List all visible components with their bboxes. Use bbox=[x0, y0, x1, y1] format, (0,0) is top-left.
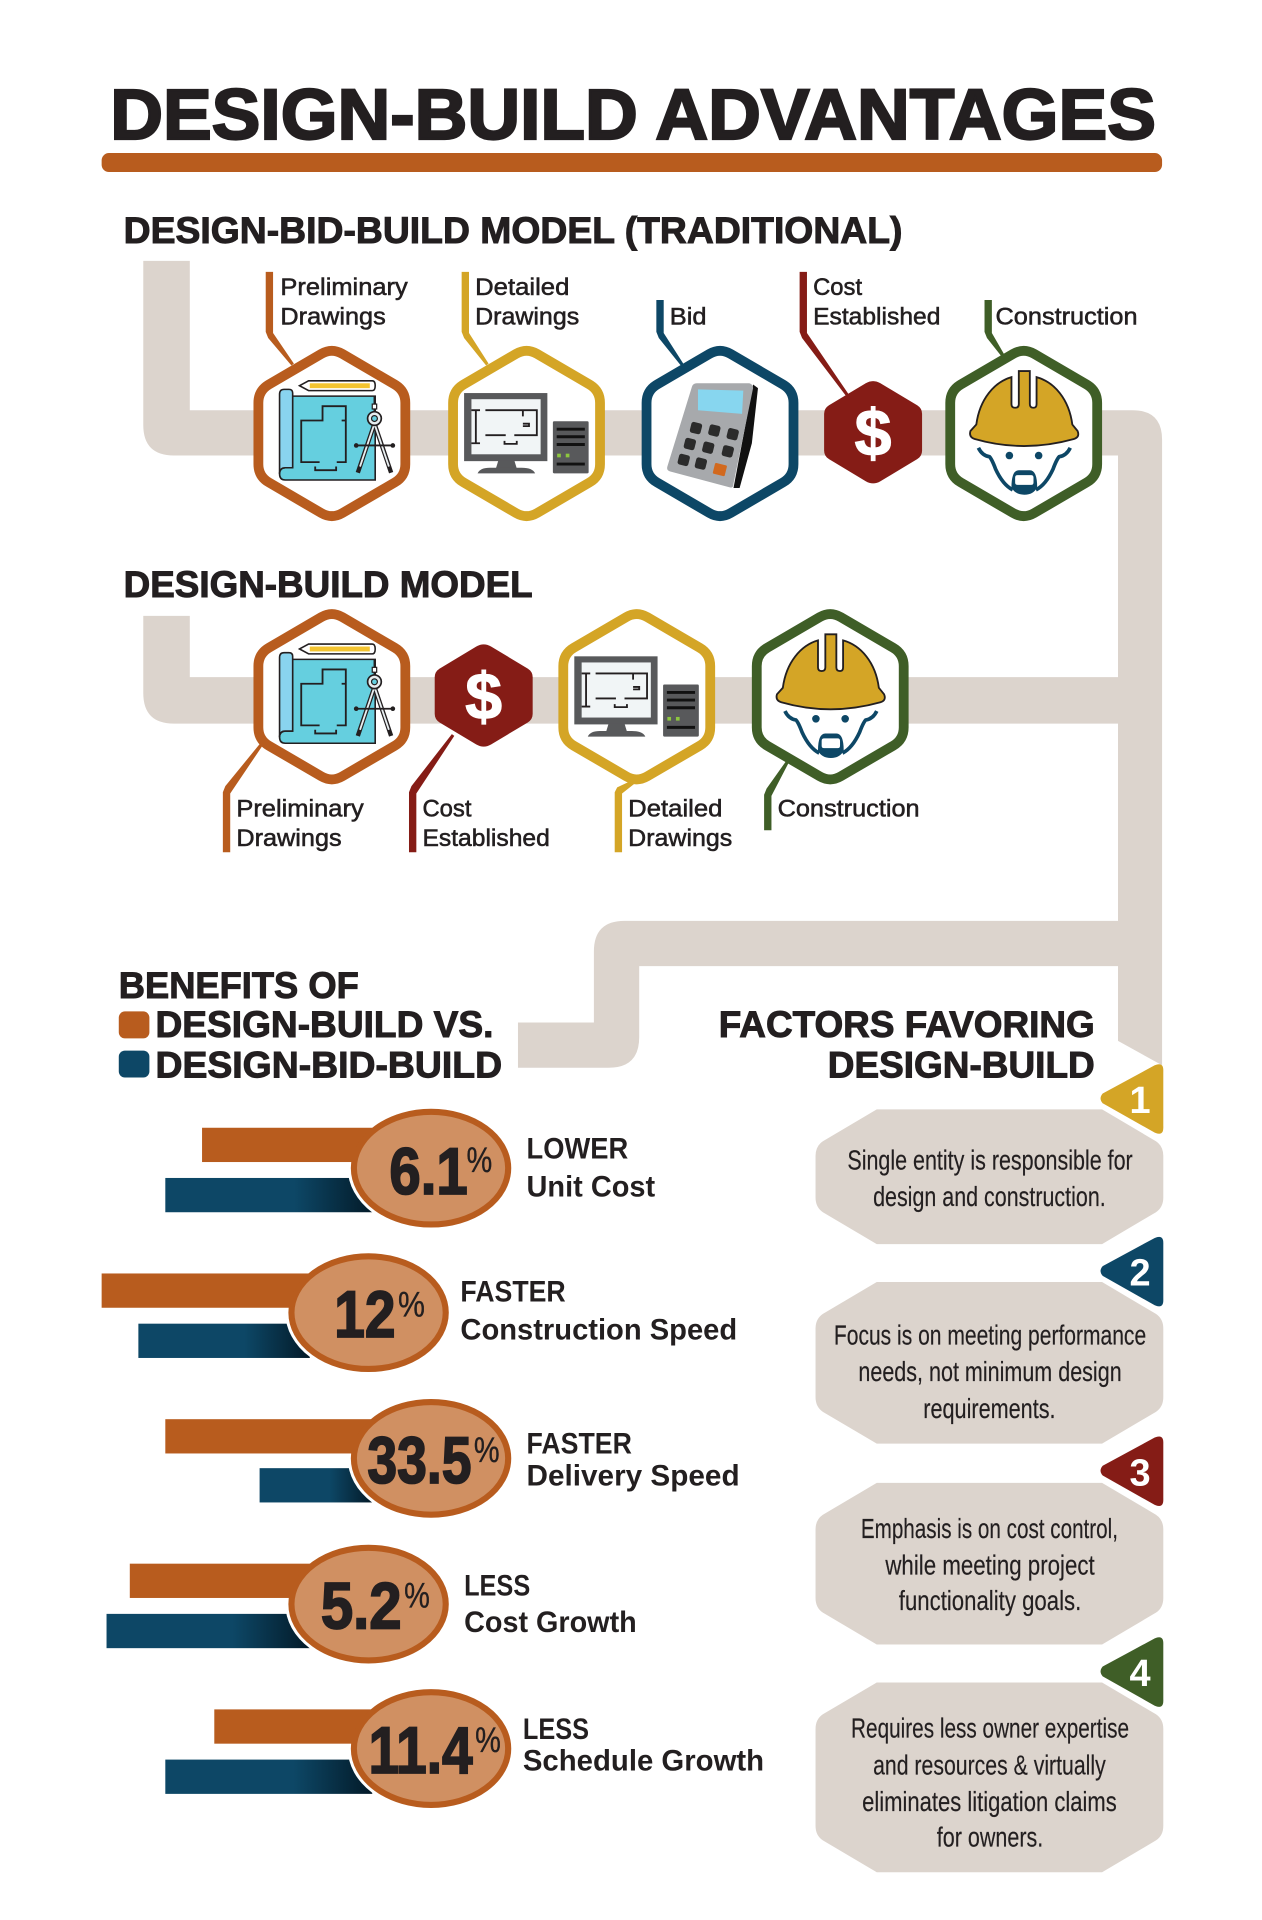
heading and legend: benefits: BENEFITS OF bbox=[119, 965, 359, 1006]
factor 1: 1 bbox=[1129, 1080, 1151, 1122]
factor 1: design and construction. bbox=[873, 1181, 1106, 1212]
step: cost established (traditional) bbox=[800, 272, 940, 483]
flow track: design-bid-build path bbox=[143, 261, 1162, 1065]
step: detailed drawings (traditional) bbox=[453, 272, 600, 516]
benefit: 11.4% less schedule growth: LESS bbox=[523, 1713, 589, 1746]
flow track: design-build path bbox=[143, 616, 1118, 724]
benefit: 12% faster construction speed: 12 bbox=[334, 1278, 396, 1352]
heading and legend: benefits: DESIGN-BID-BUILD bbox=[156, 1045, 502, 1086]
heading: factors favoring design-build bbox=[719, 1004, 1095, 1086]
step: preliminary drawings (design-build): Drawings bbox=[236, 825, 342, 852]
step: cost established (design-build): Established bbox=[422, 825, 550, 852]
step: cost established (traditional): $ bbox=[855, 397, 891, 471]
benefit: 33.5% faster delivery speed: % bbox=[474, 1430, 500, 1470]
step: construction (traditional) bbox=[950, 300, 1138, 516]
factor 3: while meeting project bbox=[885, 1550, 1095, 1581]
flow track: connector to benefits bbox=[518, 921, 1118, 1068]
factor 2: requirements. bbox=[923, 1393, 1056, 1424]
step: cost established (design-build) bbox=[409, 644, 550, 852]
benefit: 6.1% lower unit cost: % bbox=[467, 1140, 492, 1180]
benefit: 12% faster construction speed: Construction Speed bbox=[460, 1314, 737, 1347]
benefit: 11.4% less schedule growth: Schedule Growth bbox=[523, 1745, 764, 1778]
factor 4: 4 bbox=[1129, 1653, 1151, 1695]
benefit: 12% faster construction speed bbox=[102, 1250, 737, 1375]
benefit: 33.5% faster delivery speed: 33.5 bbox=[367, 1424, 471, 1498]
step: construction (traditional): Construction bbox=[996, 303, 1138, 330]
step: cost established (traditional): Cost bbox=[813, 274, 862, 301]
step: detailed drawings (traditional): Drawings bbox=[475, 303, 579, 330]
benefit: 5.2% less cost growth: Cost Growth bbox=[464, 1606, 637, 1639]
step: preliminary drawings (design-build): Preliminary bbox=[236, 796, 364, 823]
benefit: 6.1% lower unit cost: Unit Cost bbox=[527, 1170, 655, 1203]
step: preliminary drawings (design-build) bbox=[223, 614, 405, 852]
step: preliminary drawings (traditional): Drawings bbox=[280, 303, 386, 330]
benefit: 11.4% less schedule growth bbox=[165, 1686, 764, 1811]
heading: factors favoring design-build: FACTORS FAVORING bbox=[719, 1004, 1095, 1045]
heading: design-bid-build model: DESIGN-BID-BUILD MODEL (TRADITIONAL) bbox=[124, 210, 902, 251]
benefit: 33.5% faster delivery speed bbox=[165, 1396, 740, 1521]
heading: factors favoring design-build: DESIGN-BUILD bbox=[828, 1045, 1095, 1086]
step: detailed drawings (design-build): Drawings bbox=[628, 825, 732, 852]
factor 4: eliminates litigation claims bbox=[862, 1786, 1117, 1817]
heading and legend: benefits bbox=[119, 965, 502, 1086]
benefit: 5.2% less cost growth: % bbox=[404, 1576, 430, 1616]
step: detailed drawings (design-build) bbox=[563, 614, 732, 852]
factor 4: Requires less owner expertise bbox=[851, 1713, 1129, 1744]
benefit: 12% faster construction speed: FASTER bbox=[460, 1276, 566, 1309]
step: detailed drawings (design-build): Detailed bbox=[628, 796, 722, 823]
factor 3 bbox=[816, 1436, 1163, 1644]
step: bid (traditional): Bid bbox=[670, 303, 707, 330]
heading: design-build model: DESIGN-BUILD MODEL bbox=[124, 564, 533, 605]
factor 2: Focus is on meeting performance bbox=[834, 1319, 1146, 1350]
benefit: 6.1% lower unit cost: LOWER bbox=[527, 1132, 628, 1165]
factor 2: needs, not minimum design bbox=[858, 1356, 1122, 1387]
step: construction (design-build) bbox=[757, 614, 920, 830]
benefit: 6.1% lower unit cost: 6.1 bbox=[389, 1135, 468, 1209]
step: construction (design-build): Construction bbox=[778, 796, 920, 823]
factor 4 bbox=[816, 1637, 1163, 1872]
title: DESIGN-BUILD ADVANTAGES bbox=[110, 76, 1156, 155]
benefit: 6.1% lower unit cost bbox=[165, 1106, 655, 1231]
benefit: 33.5% faster delivery speed: FASTER bbox=[527, 1427, 632, 1460]
benefit: 5.2% less cost growth bbox=[107, 1542, 637, 1667]
factor 1 bbox=[816, 1064, 1163, 1244]
factor 4: and resources & virtually bbox=[873, 1749, 1106, 1780]
benefit: 11.4% less schedule growth: % bbox=[475, 1720, 501, 1760]
step: detailed drawings (traditional): Detailed bbox=[475, 274, 569, 301]
benefit: 5.2% less cost growth: 5.2 bbox=[321, 1570, 402, 1644]
factor 2: 2 bbox=[1129, 1253, 1151, 1295]
step: preliminary drawings (traditional) bbox=[258, 272, 409, 516]
factor 2 bbox=[816, 1237, 1163, 1444]
factor 3: functionality goals. bbox=[899, 1585, 1081, 1616]
step: cost established (design-build): Cost bbox=[422, 796, 472, 823]
benefit: 5.2% less cost growth: LESS bbox=[464, 1570, 530, 1603]
benefit: 33.5% faster delivery speed: Delivery Speed bbox=[527, 1459, 740, 1492]
step: bid (traditional) bbox=[647, 300, 793, 516]
factor 3: 3 bbox=[1129, 1452, 1151, 1494]
heading and legend: benefits: DESIGN-BUILD VS. bbox=[156, 1004, 493, 1045]
benefit: 12% faster construction speed: % bbox=[398, 1284, 425, 1324]
step: cost established (traditional): Established bbox=[813, 303, 940, 330]
step: cost established (design-build): $ bbox=[465, 660, 502, 734]
title rule bbox=[102, 153, 1162, 172]
factor 4: for owners. bbox=[937, 1822, 1043, 1853]
factor 3: Emphasis is on cost control, bbox=[861, 1513, 1118, 1544]
factor 1: Single entity is responsible for bbox=[847, 1144, 1133, 1175]
step: preliminary drawings (traditional): Preliminary bbox=[280, 274, 409, 301]
benefit: 11.4% less schedule growth: 11.4 bbox=[369, 1714, 473, 1788]
